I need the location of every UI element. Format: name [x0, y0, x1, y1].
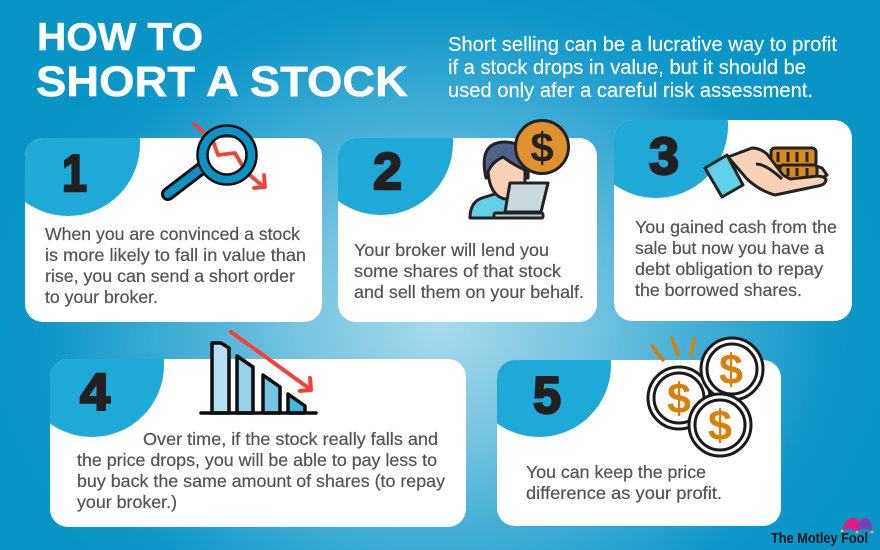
step 1 text: is more likely to fall in value than [45, 245, 306, 265]
step 5 text: You can keep the price [526, 462, 706, 482]
step 5 text: difference as your profit. [526, 483, 722, 503]
step 3 text: the borrowed shares. [635, 280, 802, 300]
step number 1: 1 [62, 145, 87, 203]
step 2 text [354, 240, 584, 302]
icon: three dollar coins: $ [719, 346, 743, 394]
step 1 text: to your broker. [45, 287, 158, 307]
step 4 text [77, 429, 445, 512]
icon: person with laptop and dollar coin [470, 120, 568, 218]
step 2 text: Your broker will lend you [354, 240, 549, 260]
intro text [448, 33, 837, 102]
step 1 text: rise, you can send a short order [45, 266, 295, 286]
step 3 text: sale but now you have a [635, 238, 824, 258]
intro text: if a stock drops in value, but it should be [448, 56, 806, 79]
step 2 text: and sell them on your behalf. [354, 282, 584, 302]
panel: step 2 [338, 119, 597, 322]
icon: magnifying glass over falling line [168, 124, 265, 194]
title: SHORT A STOCK [36, 58, 408, 106]
step number 2: 2 [373, 143, 402, 201]
step 3 text [635, 217, 837, 300]
icon: jester cap [841, 518, 873, 533]
panel: step 4 [50, 330, 466, 527]
step number 3: 3 [649, 128, 679, 186]
logo: The Motley Fool [771, 518, 873, 547]
icon: falling bar chart with arrow [201, 332, 316, 413]
step 1 text: When you are convinced a stock [45, 224, 300, 244]
step 1 text [45, 224, 306, 307]
step 3 text: You gained cash from the [635, 217, 837, 237]
step 4 text: Over time, if the stock really falls and [143, 429, 438, 449]
icon: person with laptop and dollar coin: $ [530, 124, 554, 171]
title [36, 16, 408, 106]
icon: hand holding coins [705, 148, 827, 197]
step 4 text: the price drops, you will be able to pay less to [77, 450, 437, 470]
step number 5: 5 [533, 367, 561, 425]
step 4 text: buy back the same amount of shares (to repay [77, 471, 445, 491]
intro text: Short selling can be a lucrative way to profit [448, 33, 837, 56]
logo: The Motley Fool: The Motley Fool [771, 531, 868, 547]
step 4 text: your broker.) [77, 492, 177, 512]
icon: three dollar coins: $ [667, 375, 691, 423]
panel: step 1 [25, 122, 322, 322]
step 5 text [526, 462, 722, 503]
icon: three dollar coins: $ [708, 402, 732, 450]
panel: step 3 [614, 120, 852, 321]
panel: step 5 [497, 336, 781, 526]
step number 4: 4 [80, 364, 110, 422]
icon: three dollar coins [648, 338, 763, 456]
step 3 text: debt obligation to repay [635, 259, 823, 279]
title: HOW TO [37, 16, 203, 59]
step 2 text: some shares of that stock [354, 261, 561, 281]
intro text: used only afer a careful risk assessment. [448, 79, 813, 102]
